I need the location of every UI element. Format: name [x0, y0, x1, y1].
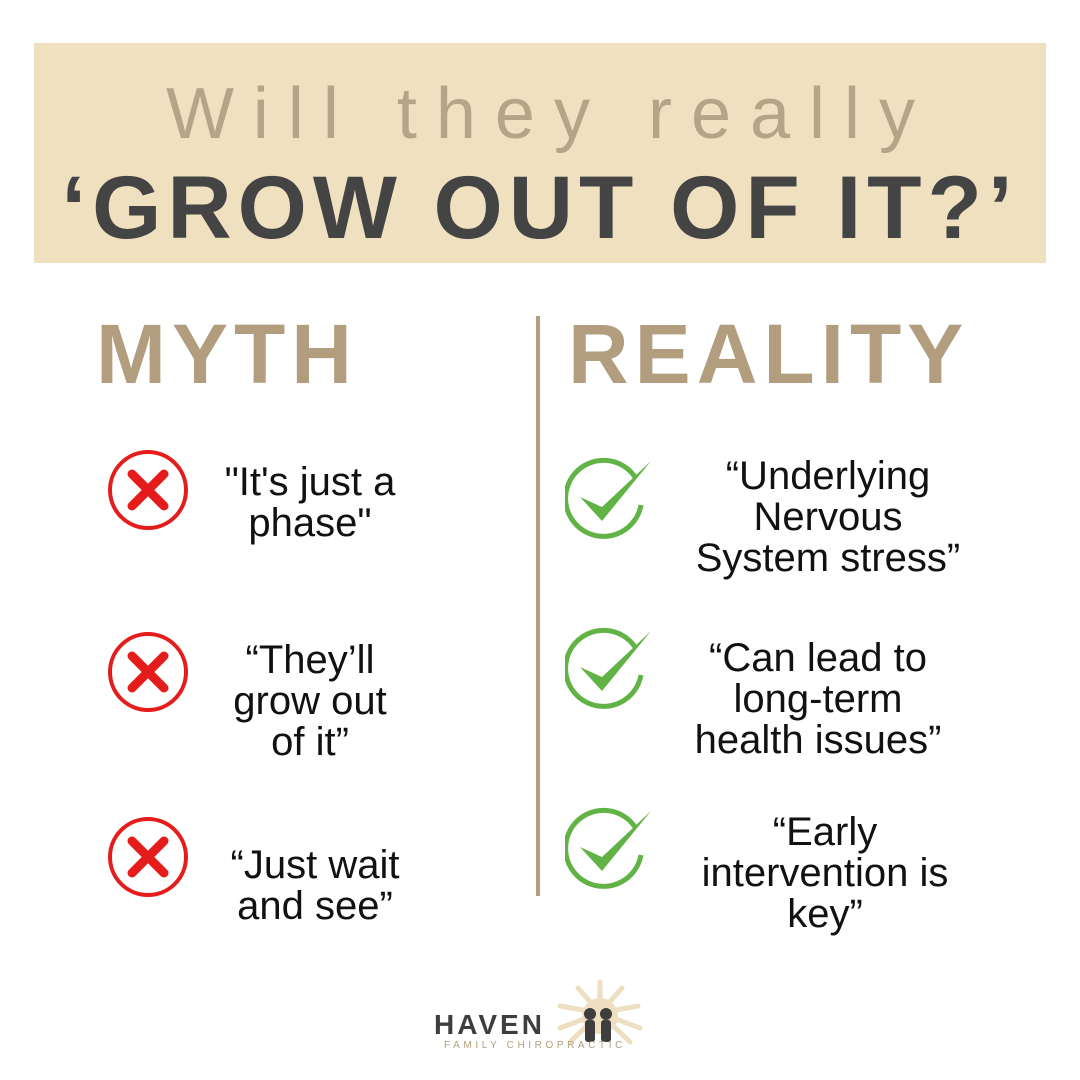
- myth text 2: of it”: [271, 720, 349, 764]
- reality text 3: intervention is: [702, 851, 948, 895]
- myth text 2: grow out: [233, 679, 387, 723]
- reality text 1: System stress”: [696, 536, 960, 580]
- myth text 3: “Just wait: [231, 843, 399, 887]
- reality text 2: health issues”: [695, 718, 941, 762]
- myth text 1: "It's just a: [225, 460, 395, 504]
- reality text 3: key”: [787, 892, 863, 936]
- title banner: [34, 43, 1046, 263]
- logo: [434, 980, 642, 1051]
- myth text 3: [231, 843, 400, 928]
- reality text 3: [702, 810, 948, 936]
- logo sun icon: [558, 980, 642, 1044]
- reality text 3: “Early: [773, 810, 877, 854]
- myth text 3: and see”: [237, 884, 393, 928]
- icon: x 3: [108, 817, 188, 897]
- logo wordmark: HAVEN: [434, 1009, 545, 1040]
- reality text 1: Nervous: [754, 495, 902, 539]
- title line 1: Will they really: [166, 74, 934, 154]
- reality text 2: long-term: [734, 677, 902, 721]
- divider: [536, 316, 540, 896]
- reality text 1: [696, 454, 960, 580]
- reality text 1: “Underlying: [726, 454, 930, 498]
- reality text 2: “Can lead to: [709, 636, 927, 680]
- icon: check 2: [565, 628, 651, 709]
- reality text 2: [695, 636, 941, 762]
- icon: x 2: [108, 632, 188, 712]
- icon: check 3: [565, 808, 651, 889]
- icon: x 1: [108, 450, 188, 530]
- title line 2: ‘GROW OUT OF IT?’: [61, 157, 1019, 257]
- heading: myth: MYTH: [96, 307, 358, 401]
- myth text 1: [225, 460, 396, 545]
- heading: reality: REALITY: [568, 307, 969, 401]
- logo tagline: FAMILY CHIROPRACTIC: [444, 1040, 626, 1051]
- myth text 1: phase": [248, 501, 372, 545]
- icon: check 1: [565, 458, 651, 539]
- myth text 2: [233, 638, 387, 764]
- myth text 2: “They’ll: [246, 638, 374, 682]
